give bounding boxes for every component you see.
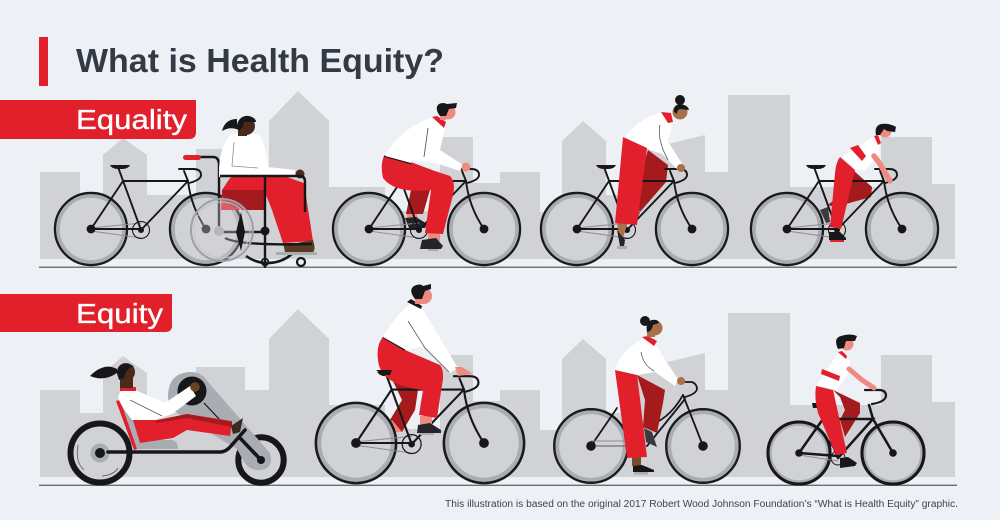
wheelchair frame [220, 176, 312, 268]
figure: woman in wheelchair [183, 116, 317, 268]
figure: woman on bicycle [615, 95, 689, 249]
title: What is Health Equity? [76, 42, 444, 79]
hair [675, 95, 685, 105]
shoe [840, 457, 857, 468]
ground line: equity row [39, 485, 957, 486]
figure: medium woman [615, 316, 685, 474]
title accent bar [39, 37, 48, 86]
rear wheel [70, 424, 130, 482]
frame [108, 430, 261, 460]
collar [432, 116, 446, 128]
head [440, 104, 456, 120]
figure: cyclist far leg [820, 170, 872, 223]
bicycle: medium woman [554, 382, 740, 483]
torso [219, 134, 296, 177]
seat [120, 401, 178, 449]
trousers [830, 157, 855, 229]
grey crank housing [168, 372, 271, 470]
banner: Equality [0, 100, 196, 139]
attribution note: This illustration is based on the original 2017 Robert Wood Johnson Foundation’s “What is Health Equity” graphic. [445, 499, 958, 510]
skyline: equality row [40, 91, 955, 259]
shirt stripe [821, 369, 840, 381]
trousers [133, 414, 232, 443]
bicycle: cyclist [751, 165, 938, 265]
shirt [817, 353, 850, 390]
head [648, 320, 662, 336]
rear upright and push handle [200, 157, 219, 230]
hand [677, 377, 685, 385]
hair [876, 124, 896, 135]
caster [297, 258, 305, 266]
collar [120, 387, 136, 391]
trousers [615, 137, 647, 225]
banner: Equality: Equality [76, 104, 187, 135]
trousers [815, 386, 847, 455]
head [672, 104, 688, 120]
hand [677, 164, 685, 172]
ground line: equality row [39, 267, 957, 268]
chainring [178, 376, 206, 406]
torso and arm [118, 386, 196, 420]
trousers [222, 167, 313, 243]
head [416, 288, 432, 304]
empty bicycle [55, 165, 242, 265]
hand [462, 162, 470, 172]
trousers [378, 337, 443, 418]
belt [383, 337, 405, 350]
bicycle: man [333, 165, 520, 265]
black wheel brace [236, 212, 245, 251]
hair and ponytail [222, 116, 256, 131]
near foot [632, 456, 641, 466]
trousers [382, 156, 454, 234]
figure: man far leg [405, 160, 432, 228]
torso and arm [625, 112, 683, 170]
head [237, 117, 255, 135]
hand [455, 367, 473, 376]
near foot [428, 233, 440, 241]
collar [407, 299, 422, 309]
big wheel [191, 199, 253, 261]
recumbent tricycle and rider [70, 363, 284, 483]
hair [411, 284, 431, 299]
torso and arm [383, 303, 458, 373]
torso and arm [615, 339, 678, 386]
bicycle: tall man [316, 372, 524, 483]
foot [420, 416, 432, 425]
bicycle: woman [541, 165, 728, 265]
collar [661, 112, 673, 123]
figure: child far leg [828, 390, 860, 452]
figure: cyclist on bicycle [829, 124, 896, 242]
shoe [829, 232, 846, 240]
head [840, 338, 854, 350]
figure: man on bicycle [382, 103, 470, 251]
front wheel [238, 437, 284, 483]
far leg [637, 375, 665, 433]
shoes [283, 240, 314, 252]
saddle [376, 370, 392, 375]
shoe [231, 418, 243, 434]
figure: tall man far leg [378, 375, 418, 443]
torso and arm [385, 117, 463, 171]
neck and head [120, 378, 133, 388]
bicycle: small [768, 390, 924, 484]
trousers [615, 370, 647, 458]
belt [384, 156, 411, 164]
arm [874, 156, 890, 181]
far wheel arc [246, 253, 293, 263]
head [878, 124, 892, 138]
hair and ponytail [90, 364, 134, 380]
shirt [842, 137, 880, 170]
figure: child on bicycle [815, 334, 874, 468]
seat shadow [222, 190, 264, 210]
skyline: equity row [40, 309, 955, 477]
collar [642, 336, 657, 346]
hair [437, 103, 457, 116]
figure: woman far leg [630, 150, 668, 220]
hand [190, 382, 200, 392]
figure: tall man on bicycle [376, 284, 473, 435]
footrest [276, 252, 317, 255]
collar [874, 135, 881, 145]
banner: Equity: Equity [76, 298, 163, 329]
hair [640, 316, 650, 326]
hair [836, 334, 857, 349]
arm [849, 369, 874, 388]
shirt stripe [850, 145, 866, 161]
collar [838, 351, 847, 359]
hand [296, 170, 304, 178]
banner: Equity [0, 294, 172, 332]
foot [617, 222, 628, 244]
